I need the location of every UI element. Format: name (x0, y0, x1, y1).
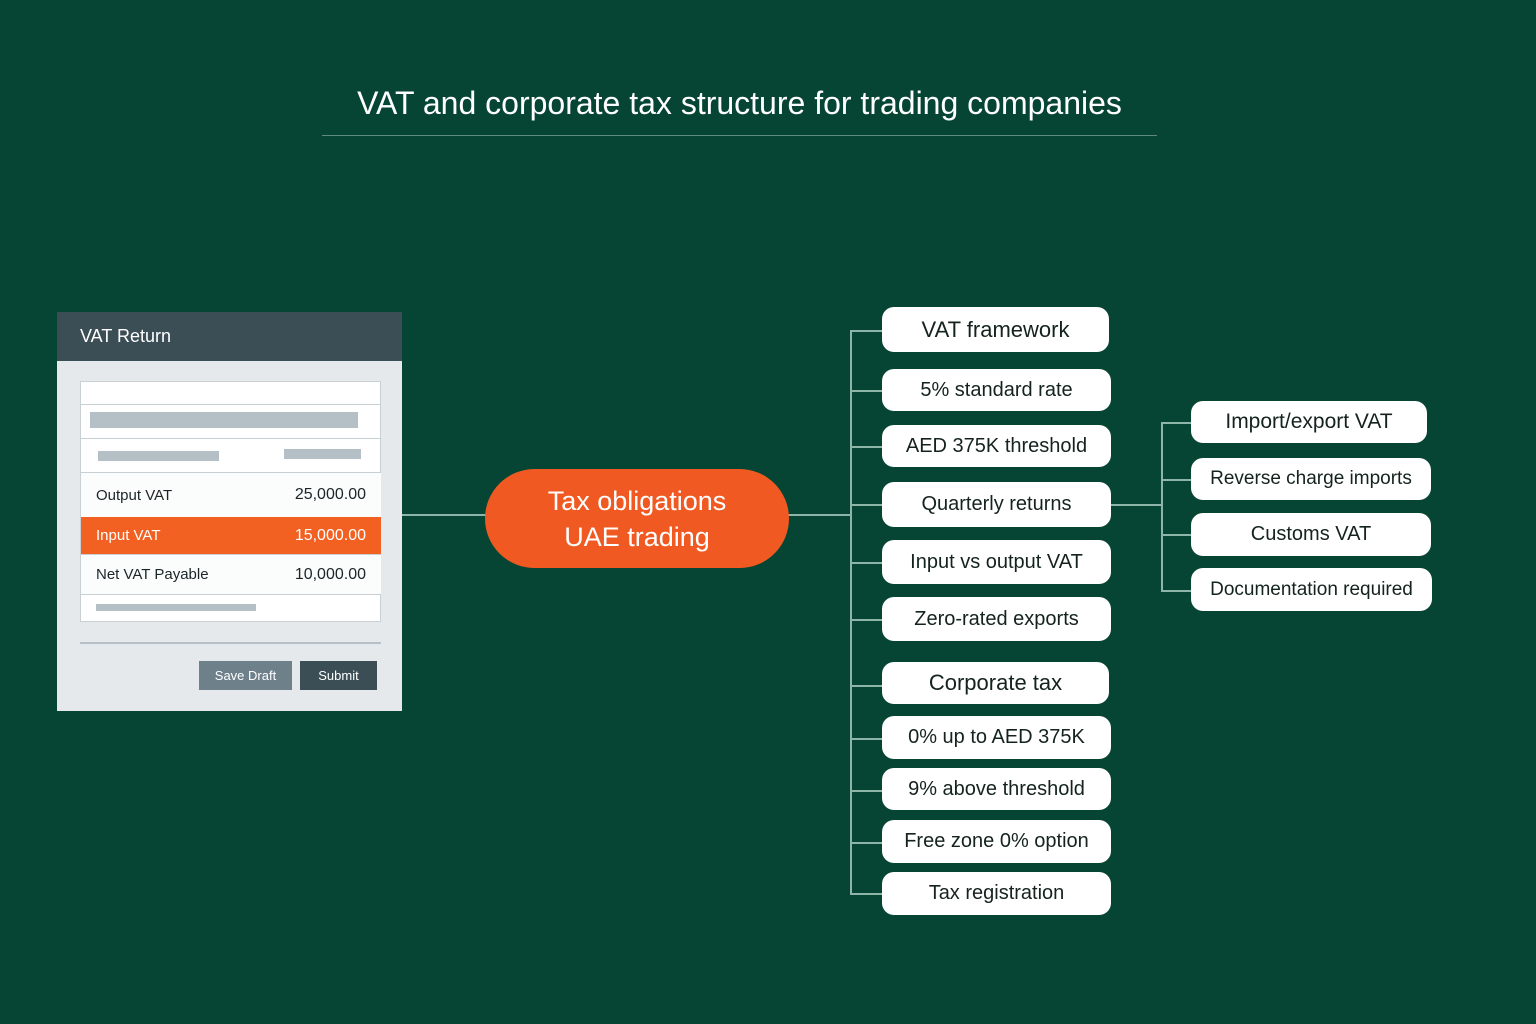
text: 0% up to AED 375K (908, 726, 1085, 748)
nodes: import sub-branch: Import/export VAT (1225, 410, 1393, 433)
panel: VAT return form (57, 312, 402, 711)
text: Input vs output VAT (910, 550, 1083, 572)
nodes: VAT and CT list: VAT framework (922, 316, 1069, 342)
text: Free zone 0% option (904, 830, 1089, 852)
form table (80, 381, 381, 622)
row: net VAT payable: Net VAT Payable (96, 566, 209, 583)
row: net VAT payable (81, 554, 381, 594)
central node: Tax obligations (548, 486, 726, 516)
nodes: import sub-branch (1191, 401, 1427, 443)
text: Reverse charge imports (1210, 468, 1412, 489)
central node (485, 469, 789, 568)
text: Documentation required (1210, 578, 1413, 600)
text: Corporate tax (929, 670, 1062, 695)
row: output VAT: Output VAT (96, 486, 172, 504)
button: save draft: Save Draft (215, 668, 276, 683)
connectors (402, 514, 489, 516)
text: Zero-rated exports (914, 608, 1079, 630)
button: submit: Submit (318, 668, 359, 683)
text: Tax registration (929, 882, 1064, 904)
row: net VAT payable: 10,000.00 (295, 566, 366, 582)
row: output VAT: 25,000.00 (295, 486, 366, 503)
button: submit (300, 661, 377, 690)
row: input VAT (81, 517, 381, 554)
text: 5% standard rate (920, 378, 1073, 400)
row: input VAT: 15,000.00 (295, 526, 366, 544)
title: VAT and corporate tax structure for trading companies (357, 85, 1122, 121)
row: output VAT (81, 472, 381, 517)
central node: UAE trading (564, 522, 710, 552)
form header: VAT Return (80, 326, 171, 346)
text: Customs VAT (1251, 523, 1371, 545)
nodes: VAT and CT list (882, 307, 1109, 352)
button: save draft (199, 661, 292, 690)
row: input VAT: Input VAT (96, 527, 160, 544)
text: Quarterly returns (921, 493, 1072, 515)
text: AED 375K threshold (906, 434, 1087, 456)
text: 9% above threshold (908, 778, 1085, 800)
form header (57, 312, 402, 361)
